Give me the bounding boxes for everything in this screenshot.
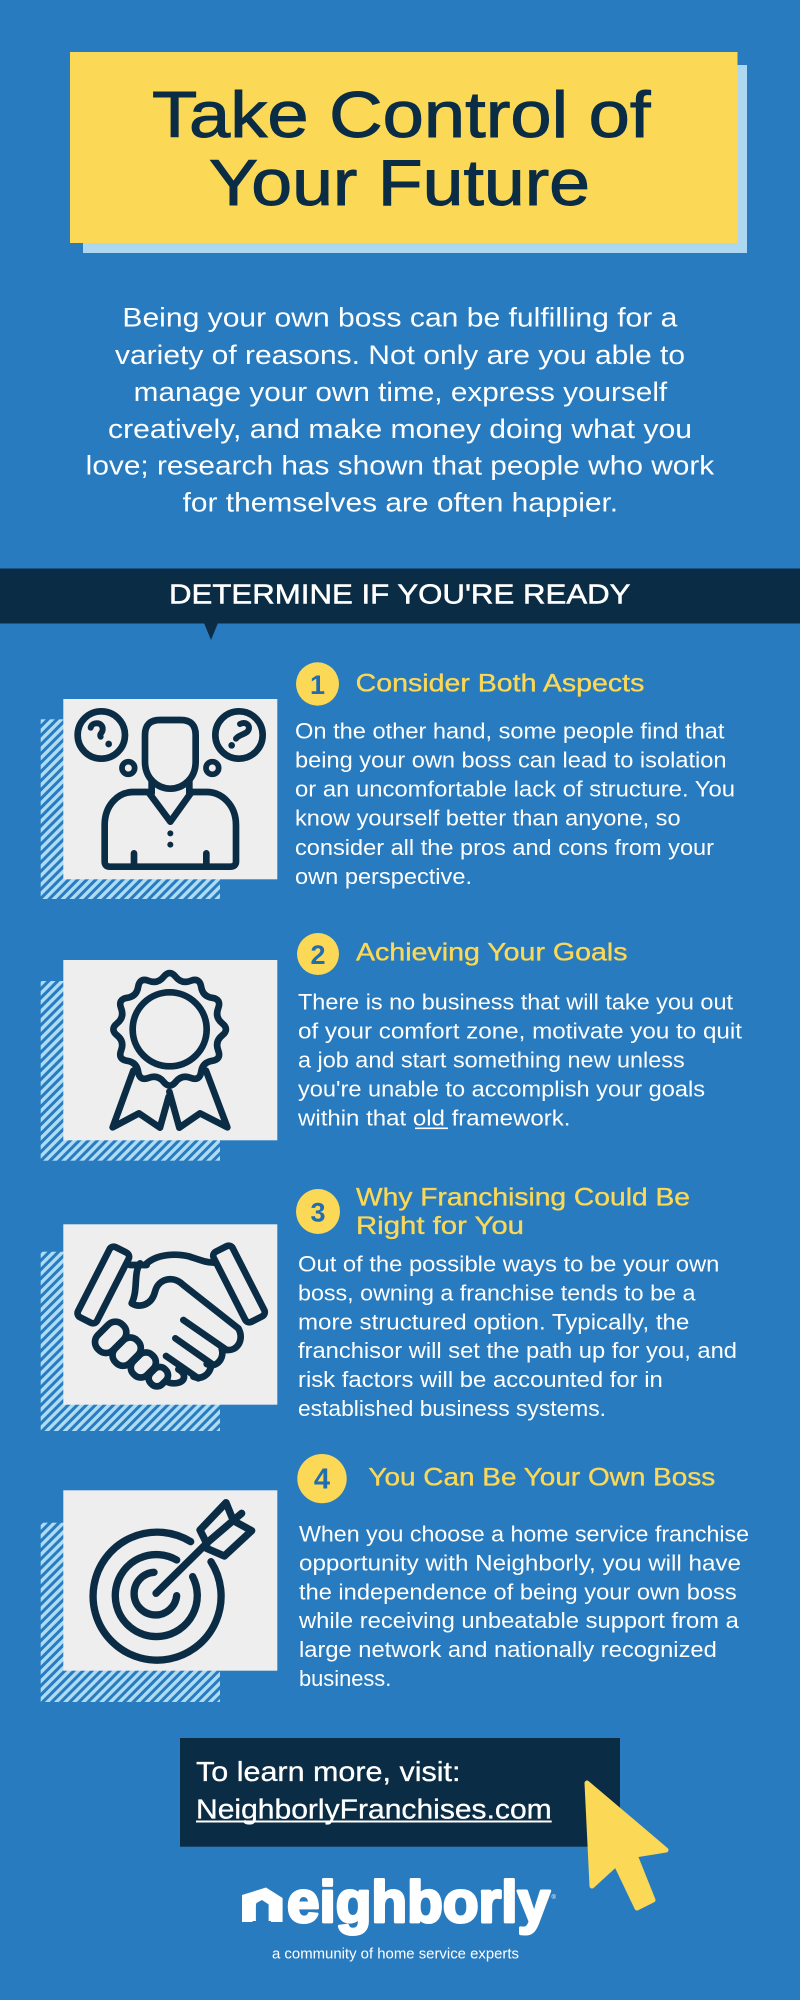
step 3 heading: Right for You [356,1213,524,1240]
step 4 body text [298,1521,749,1691]
step 3 body text: risk factors will be accounted for in [298,1367,663,1392]
step 2 number badge [297,933,339,975]
intro paragraph: creatively, and make money doing what you [108,414,692,444]
step 3 number badge: 3 [310,1198,326,1228]
icon: handshake [76,1244,266,1389]
step 4 body text: while receiving unbeatable support from a [298,1608,739,1633]
logo [242,1870,556,1963]
step 3 body text: established business systems. [298,1396,606,1421]
step 3 body text: more structured option. Typically, the [298,1309,689,1334]
section banner: DETERMINE IF YOU'RE READY [169,578,630,609]
step 2 hatch backdrop [41,981,220,1161]
title: Take Control of [152,78,652,151]
step 2 body text: of your comfort zone, motivate you to quit [298,1018,742,1043]
step 1 body text [295,719,735,889]
icon: award ribbon [113,973,227,1128]
step 2 body text: a job and start something new unless [298,1047,685,1072]
logo: n [243,1875,281,1933]
step 3 heading: Why Franchising Could Be [356,1185,690,1212]
step 1 body text: being your own boss can lead to isolation [295,748,726,773]
step 3 body text [298,1251,737,1421]
call to action box: To learn more, visit: [196,1756,460,1787]
icon: person with question marks [78,711,263,867]
step 2 number badge: 2 [310,940,326,970]
step 1 number badge: 1 [310,670,325,700]
step 2 body text [297,989,742,1130]
step 1 body text: or an uncomfortable lack of structure. You [295,777,735,802]
step 2 panel [41,933,742,1161]
step 1 body text: On the other hand, some people find that [295,719,724,744]
title panel [70,52,747,253]
step 4 panel [41,1454,749,1702]
title: Your Future [209,146,590,219]
call to action box: NeighborlyFranchises.com [196,1793,552,1824]
step 4 icon card [63,1490,277,1671]
step 3 number badge [296,1189,340,1234]
intro paragraph: for themselves are often happier. [183,488,618,518]
step 1 body text: know yourself better than anyone, so [295,806,681,831]
step 3 body text: franchisor will set the path up for you, and [298,1338,737,1363]
step 2 body text: within that old framework. [297,1105,570,1130]
section banner [0,568,800,640]
intro paragraph: variety of reasons. Not only are you able to [115,340,685,370]
step 3 body text: boss, owning a franchise tends to be a [298,1280,696,1305]
intro paragraph [86,302,715,518]
step 4 body text: opportunity with Neighborly, you will have [299,1550,741,1575]
step 2 heading: Achieving Your Goals [356,940,628,967]
logo: eighborly [287,1870,550,1935]
step 3 panel [41,1185,737,1431]
step 3 heading [356,1185,690,1240]
step 3 hatch backdrop [41,1252,220,1431]
step 4 number badge [297,1454,347,1503]
logo: ® [552,1894,556,1901]
step 4 body text: When you choose a home service franchise [299,1521,749,1546]
intro paragraph: manage your own time, express yourself [134,377,668,407]
step 1 body text: consider all the pros and cons from your [295,835,715,860]
step 4 heading: You Can Be Your Own Boss [368,1465,715,1492]
step 1 hatch backdrop [41,719,220,899]
step 1 panel [41,662,735,899]
step 2 body text: There is no business that will take you out [298,989,733,1014]
step 4 body text: large network and nationally recognized [299,1637,717,1662]
intro paragraph: love; research has shown that people who work [86,451,715,481]
step 2 body text: you're unable to accomplish your goals [298,1076,705,1101]
step 4 body text: the independence of being your own boss [299,1579,737,1604]
title [152,78,652,219]
call to action box [180,1738,620,1847]
step 3 icon card [63,1224,277,1405]
step 1 number badge [296,662,339,706]
step 2 icon card [63,960,277,1140]
icon: cursor arrow [587,1783,666,1908]
intro paragraph: Being your own boss can be fulfilling for a [122,302,678,332]
step 3 body text: Out of the possible ways to be your own [298,1251,719,1276]
step 4 number badge: 4 [314,1464,330,1496]
icon: target with arrow [93,1503,252,1660]
step 4 hatch backdrop [41,1523,220,1702]
step 1 heading: Consider Both Aspects [356,671,644,698]
tagline: a community of home service experts [272,1947,519,1963]
step 1 body text: own perspective. [295,864,472,889]
step 1 icon card [63,699,277,879]
step 4 body text: business. [299,1666,391,1691]
